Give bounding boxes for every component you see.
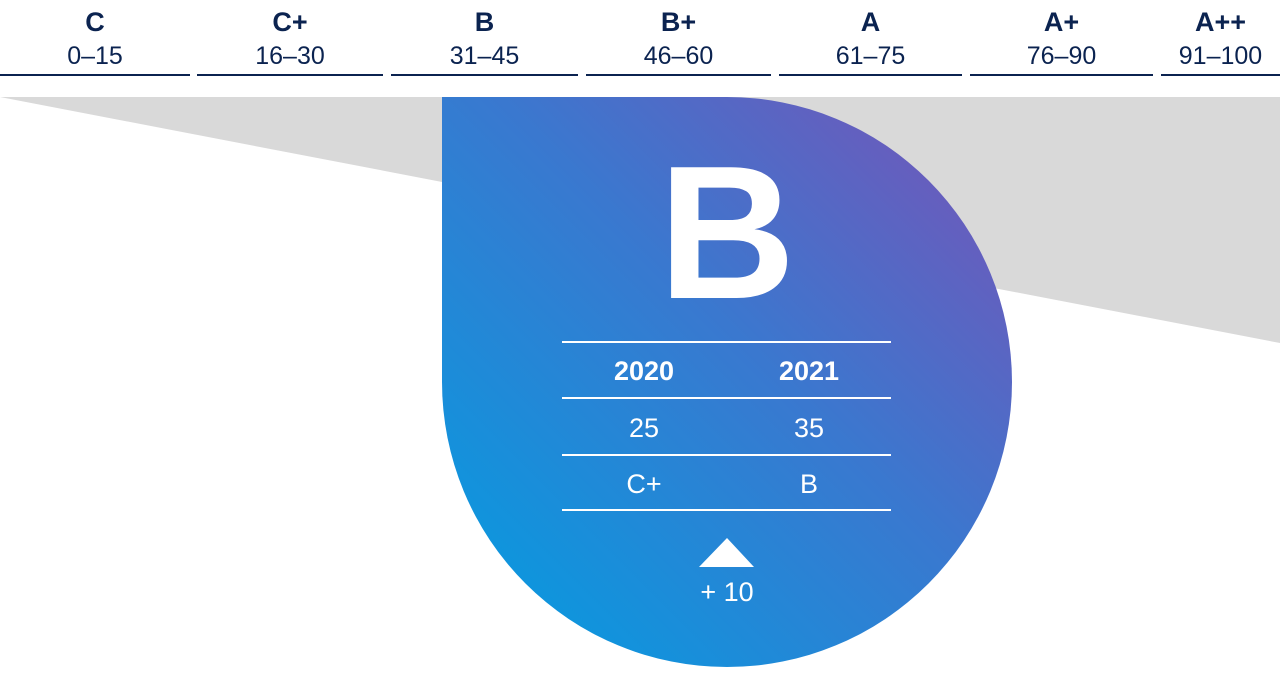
grade C: 0–15 [67, 42, 123, 70]
grade A++ [1161, 0, 1280, 76]
grade C+ [197, 0, 383, 76]
grade B: B [800, 469, 818, 499]
score 25: 25 [629, 413, 659, 443]
grade B+: 46–60 [644, 42, 713, 70]
year 2020: 2020 [614, 356, 674, 386]
grade A++: A++ [1195, 7, 1246, 37]
big grade letter: B [658, 127, 796, 339]
grade A+: A+ [1044, 7, 1079, 37]
score table [562, 341, 891, 513]
score 35: 35 [794, 413, 824, 443]
change +10: + 10 [700, 577, 754, 607]
grade C [0, 0, 190, 76]
grade C+: C+ [272, 7, 308, 37]
year 2021: 2021 [779, 356, 839, 386]
grade B+: B+ [661, 7, 696, 37]
grade A: A [861, 7, 880, 37]
grade A+ [970, 0, 1153, 76]
grade A+: 76–90 [1027, 42, 1096, 70]
grade B: B [475, 7, 494, 37]
grade A++: 91–100 [1179, 42, 1262, 70]
header: grade scale [0, 7, 1280, 76]
grade B: 31–45 [450, 42, 519, 70]
grade A: 61–75 [836, 42, 905, 70]
grade C+: 16–30 [255, 42, 325, 70]
grade B [391, 0, 578, 76]
grade B+ [586, 0, 771, 76]
drop: score badge [442, 97, 1012, 667]
grade C: C [85, 7, 105, 37]
icon: up triangle [699, 538, 754, 567]
grade A [779, 0, 962, 76]
grade C+: C+ [626, 469, 662, 499]
